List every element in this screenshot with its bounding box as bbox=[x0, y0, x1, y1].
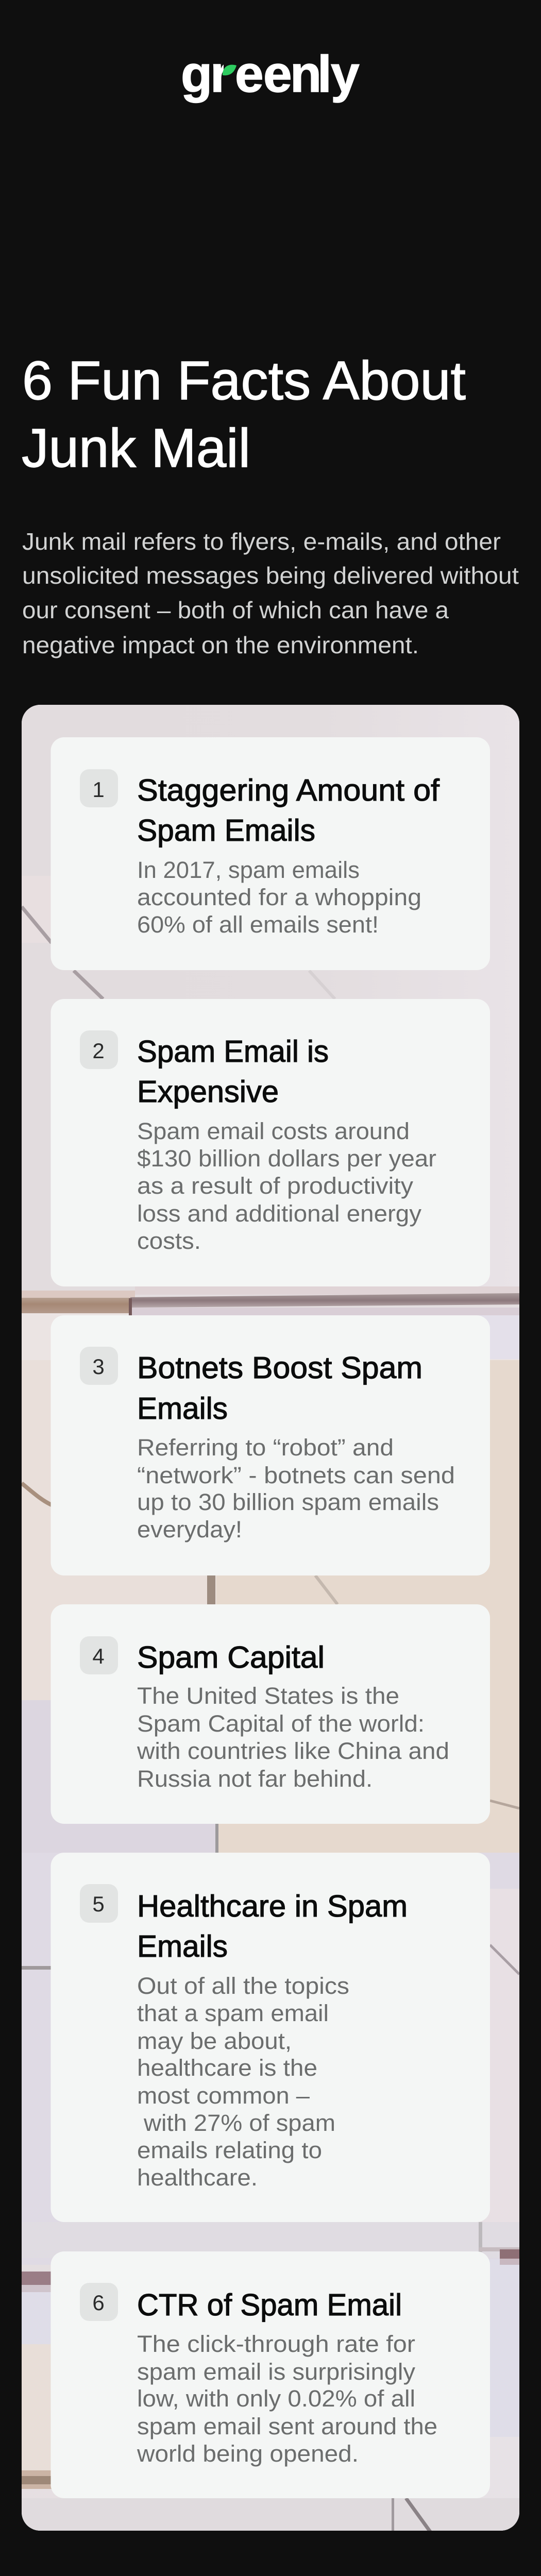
heading 2: Expensive bbox=[137, 1075, 279, 1109]
badge 1: 1 bbox=[92, 777, 105, 802]
logo: greenly: greenly bbox=[181, 45, 360, 103]
body 3: Referring to “robot” and bbox=[137, 1434, 394, 1461]
body 1 bbox=[137, 857, 421, 938]
body 2: as a result of productivity bbox=[137, 1173, 414, 1199]
heading 3: Botnets Boost Spam bbox=[137, 1351, 422, 1385]
body 4: Russia not far behind. bbox=[137, 1766, 373, 1792]
heading 5: Emails bbox=[137, 1929, 228, 1963]
body 4: Spam Capital of the world: bbox=[137, 1710, 425, 1737]
badge 4 bbox=[80, 1636, 118, 1674]
body 3: “network” - botnets can send bbox=[137, 1462, 455, 1488]
heading 1 bbox=[137, 773, 440, 848]
badge 3: 3 bbox=[92, 1354, 105, 1379]
panel background: blurred tile photo bbox=[15, 701, 526, 2535]
heading 2 bbox=[137, 1035, 329, 1109]
body 5: that a spam email bbox=[137, 2000, 329, 2026]
body 5: may be about, bbox=[137, 2028, 292, 2054]
heading 5: Healthcare in Spam bbox=[137, 1889, 408, 1923]
intro paragraph bbox=[22, 528, 519, 658]
body 2: costs. bbox=[137, 1228, 201, 1254]
title: 6 Fun Facts About bbox=[22, 350, 466, 411]
heading 4: Spam Capital bbox=[137, 1640, 325, 1674]
body 2: Spam email costs around bbox=[137, 1118, 410, 1144]
body 5: Out of all the topics bbox=[137, 1973, 349, 1999]
title bbox=[22, 350, 466, 479]
body 3: up to 30 billion spam emails bbox=[137, 1489, 439, 1515]
body 1: In 2017, spam emails bbox=[137, 857, 360, 883]
heading 1: Spam Emails bbox=[137, 814, 315, 848]
body 4: with countries like China and bbox=[137, 1738, 449, 1764]
badge 5: 5 bbox=[92, 1892, 105, 1916]
card 1 bbox=[50, 737, 490, 970]
badge 2 bbox=[80, 1030, 118, 1069]
body 2 bbox=[137, 1118, 436, 1254]
body 6: low, with only 0.02% of all bbox=[137, 2385, 415, 2412]
heading 3 bbox=[137, 1351, 422, 1426]
body 5: emails relating to bbox=[137, 2137, 322, 2163]
card 3 bbox=[50, 1315, 490, 1575]
body 5: healthcare. bbox=[137, 2164, 258, 2191]
heading 5 bbox=[137, 1889, 408, 1963]
body 4 bbox=[137, 1683, 449, 1792]
heading 2: Spam Email is bbox=[137, 1035, 329, 1069]
body 4: The United States is the bbox=[137, 1683, 399, 1709]
badge 1 bbox=[80, 769, 118, 807]
body 6: world being opened. bbox=[137, 2441, 359, 2467]
panel: facts list bbox=[15, 701, 526, 2535]
body 5 bbox=[137, 1973, 349, 2191]
heading 6: CTR of Spam Email bbox=[137, 2288, 402, 2322]
intro paragraph: unsolicited messages being delivered without bbox=[22, 562, 519, 589]
badge 5 bbox=[80, 1884, 118, 1923]
intro paragraph: our consent – both of which can have a bbox=[22, 597, 449, 623]
body 1: 60% of all emails sent! bbox=[137, 911, 379, 938]
card 5 bbox=[50, 1853, 490, 2222]
heading 3: Emails bbox=[137, 1392, 228, 1426]
body 2: $130 billion dollars per year bbox=[137, 1145, 436, 1172]
title: Junk Mail bbox=[22, 418, 250, 479]
intro paragraph: negative impact on the environment. bbox=[22, 632, 419, 658]
card 4 bbox=[50, 1604, 490, 1824]
badge 6: 6 bbox=[92, 2291, 105, 2315]
body 5: with 27% of spam bbox=[143, 2110, 335, 2136]
badge 6 bbox=[80, 2283, 118, 2321]
badge 3 bbox=[80, 1347, 118, 1385]
card 2 bbox=[50, 999, 490, 1286]
badge 2: 2 bbox=[92, 1039, 105, 1063]
body 6: spam email is surprisingly bbox=[137, 2359, 416, 2385]
body 1: accounted for a whopping bbox=[137, 884, 421, 910]
intro paragraph: Junk mail refers to flyers, e-mails, and other bbox=[22, 528, 501, 555]
body 5: most common – bbox=[137, 2082, 310, 2109]
body 3 bbox=[137, 1434, 455, 1543]
body 6: spam email sent around the bbox=[137, 2413, 437, 2439]
body 6 bbox=[137, 2331, 437, 2467]
heading 1: Staggering Amount of bbox=[137, 773, 440, 807]
body 2: loss and additional energy bbox=[137, 1200, 422, 1227]
badge 4: 4 bbox=[92, 1644, 105, 1668]
body 5: healthcare is the bbox=[137, 2055, 317, 2081]
card 6 bbox=[50, 2251, 490, 2498]
body 6: The click-through rate for bbox=[137, 2331, 415, 2357]
body 3: everyday! bbox=[137, 1516, 242, 1543]
